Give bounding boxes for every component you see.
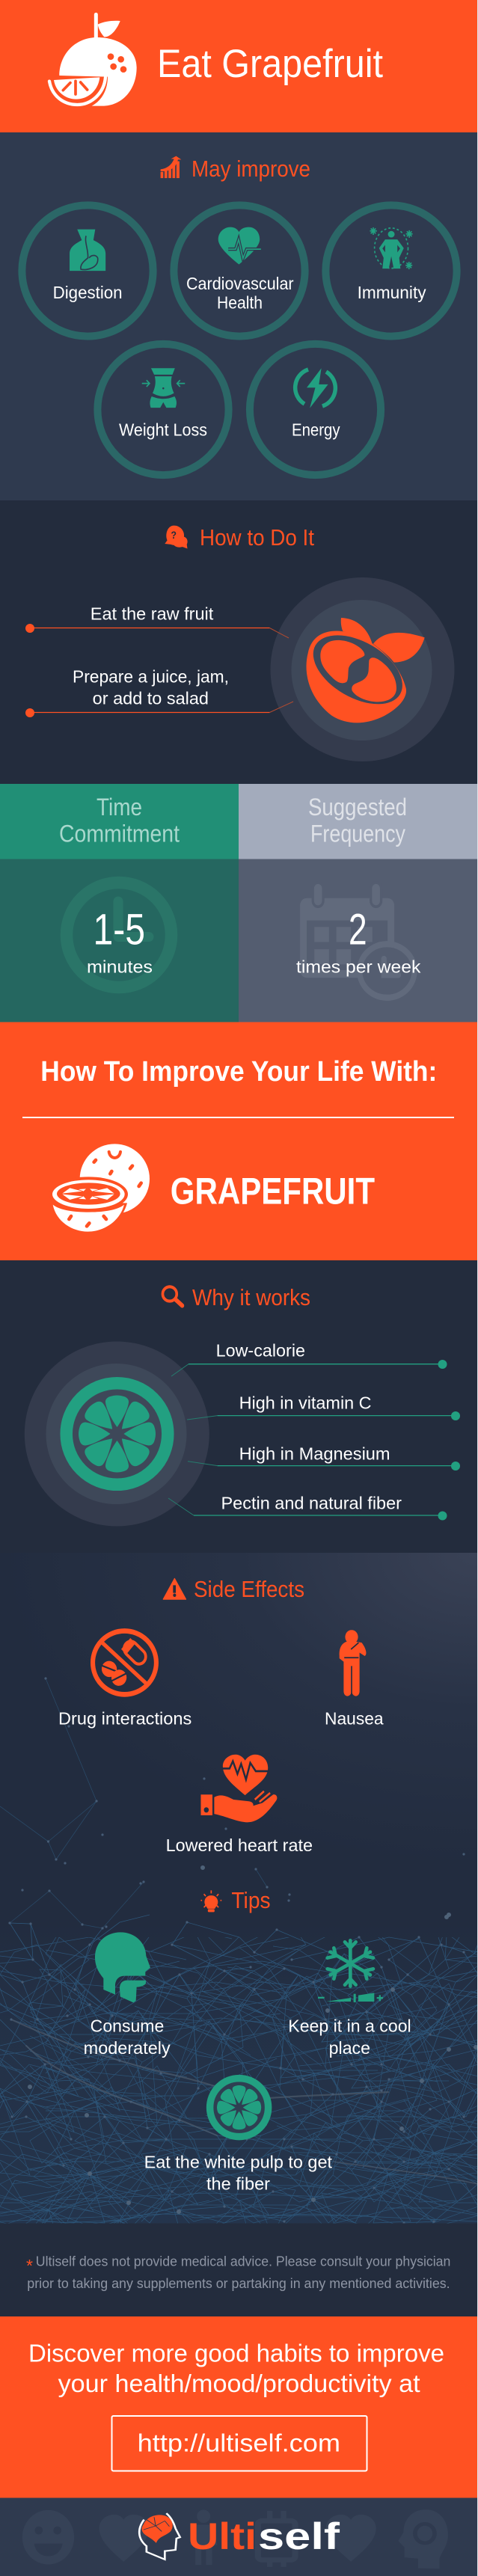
panel: suggested frequency: 2 bbox=[349, 905, 367, 954]
benefit: cardiovascular health: Health bbox=[217, 292, 263, 312]
callout: eat the raw fruit bbox=[25, 604, 289, 638]
right edge hairline bbox=[477, 0, 478, 2576]
benefit: immunity bbox=[325, 205, 457, 337]
callout: prepare a juice: or add to salad bbox=[93, 688, 209, 708]
benefit: cardiovascular health: Cardiovascular bbox=[186, 274, 294, 293]
icon: waist bbox=[142, 368, 185, 408]
panel: how to improve your life banner: GRAPEFRUIT bbox=[171, 1170, 375, 1212]
illustration: halved grapefruit in circles bbox=[271, 577, 455, 761]
tip: eat the white pulp: Eat the white pulp to get bbox=[144, 2153, 333, 2172]
icon: heart over hand bbox=[200, 1755, 277, 1822]
panel: suggested frequency: Frequency bbox=[310, 821, 405, 847]
icon: citrus wheel bbox=[210, 2079, 269, 2137]
illustration: citrus wheel in circles bbox=[25, 1342, 209, 1526]
logo: ultiself bbox=[139, 2513, 340, 2560]
icon: no pills bbox=[93, 1631, 156, 1694]
side effect: drug interactions bbox=[58, 1631, 191, 1728]
tip: keep it in a cool place bbox=[288, 1940, 411, 2058]
panel: suggested frequency: times per week bbox=[296, 957, 421, 977]
panel: call to action: your health/mood/productivity at bbox=[58, 2370, 420, 2397]
heading: tips: Tips bbox=[231, 1887, 271, 1913]
benefit: weight loss: Weight Loss bbox=[119, 420, 207, 439]
heading: how to do it: How to Do It bbox=[200, 524, 314, 551]
callout: high in vitamin c: High in vitamin C bbox=[239, 1393, 372, 1412]
icon: calendar with clock bbox=[300, 883, 414, 998]
callout: prepare a juice: Prepare a juice, jam, bbox=[73, 667, 229, 687]
icon: orange with slice bbox=[49, 14, 137, 106]
icon: snowflake with slider bbox=[318, 1940, 383, 2002]
heading: side effects: Side Effects bbox=[194, 1576, 304, 1602]
title: Eat Grapefruit bbox=[157, 42, 383, 86]
side effect: nausea: Nausea bbox=[325, 1708, 384, 1728]
callout: prepare a juice bbox=[25, 667, 293, 717]
side effect: drug interactions: Drug interactions bbox=[58, 1708, 191, 1728]
icon: whole and halved grapefruit bbox=[49, 1144, 150, 1235]
tip: eat the white pulp: the fiber bbox=[206, 2174, 270, 2194]
panel: header bbox=[0, 0, 478, 132]
heading: tips bbox=[200, 1887, 271, 1913]
icon: heart with pulse bbox=[218, 227, 261, 264]
callout: eat the raw fruit: Eat the raw fruit bbox=[91, 604, 214, 624]
tip: consume moderately: moderately bbox=[84, 2038, 171, 2058]
icon: clock behind number bbox=[67, 883, 171, 987]
side effect: lowered heart rate bbox=[166, 1755, 313, 1855]
side effect: lowered heart rate: Lowered heart rate bbox=[166, 1836, 313, 1855]
panel: suggested frequency bbox=[239, 784, 478, 1022]
panel: why it works bbox=[0, 1260, 478, 1553]
benefit: immunity: Immunity bbox=[358, 283, 426, 302]
heading: why it works: Why it works bbox=[192, 1284, 310, 1310]
benefit: energy bbox=[250, 344, 381, 475]
tip: consume moderately: Consume bbox=[91, 2017, 164, 2036]
panel: call to action: Discover more good habits to improve bbox=[28, 2340, 444, 2367]
heading: may improve: May improve bbox=[191, 156, 310, 182]
panel: may improve bbox=[0, 132, 478, 501]
callout: low-calorie bbox=[171, 1341, 447, 1376]
tip: consume moderately bbox=[84, 1932, 171, 2058]
panel: how to improve your life banner: How To Improve Your Life With: bbox=[40, 1056, 437, 1088]
side effect: nausea bbox=[325, 1630, 384, 1728]
panel: side effects and tips background bbox=[0, 1553, 478, 2269]
benefit: digestion bbox=[22, 205, 153, 337]
panel: footer bbox=[0, 2498, 478, 2576]
panel: time commitment: Time bbox=[96, 794, 142, 821]
icon: lightning bolt bbox=[295, 368, 335, 408]
panel: time commitment: Commitment bbox=[59, 821, 180, 847]
logo: ultiself: Ulti bbox=[188, 2515, 257, 2557]
link button bbox=[112, 2416, 367, 2471]
benefit: digestion: Digestion bbox=[53, 283, 123, 302]
icon: head profile bbox=[95, 1932, 150, 2002]
callout: high in vitamin c bbox=[187, 1393, 460, 1420]
panel: time commitment bbox=[0, 784, 239, 1022]
panel: disclaimer: * bbox=[26, 2256, 33, 2275]
tip: keep it in a cool place: Keep it in a cool bbox=[288, 2017, 411, 2036]
tip: keep it in a cool place: place bbox=[329, 2038, 370, 2058]
benefit: weight loss bbox=[97, 344, 229, 475]
background icons bbox=[22, 2509, 448, 2569]
callout: pectin and natural fiber: Pectin and natural fiber bbox=[221, 1493, 402, 1512]
section: tips bbox=[84, 1887, 411, 2194]
panel: time commitment: minutes bbox=[87, 957, 153, 977]
logo: ultiself: self bbox=[258, 2515, 340, 2557]
callout: pectin and natural fiber bbox=[168, 1493, 447, 1520]
icon: protected person bbox=[370, 227, 413, 269]
icon: nauseous person bbox=[340, 1630, 366, 1696]
tip: eat the white pulp bbox=[144, 2079, 333, 2194]
callout: high in magnesium bbox=[188, 1444, 460, 1471]
benefit: cardiovascular health bbox=[174, 205, 305, 337]
panel: how to improve your life banner bbox=[0, 1022, 478, 1260]
callout: low-calorie: Low-calorie bbox=[216, 1341, 305, 1361]
panel: how to do it bbox=[0, 500, 478, 784]
panel: disclaimer: prior to taking any supplements or partaking in any mentioned activities. bbox=[27, 2276, 450, 2291]
panel: call to action bbox=[0, 2316, 478, 2498]
heading: how to do it: ? bbox=[171, 529, 177, 541]
icon: digestive system bbox=[70, 230, 105, 271]
callout: high in magnesium: High in Magnesium bbox=[239, 1444, 390, 1463]
panel: time commitment: 1-5 bbox=[93, 905, 145, 954]
panel: disclaimer bbox=[0, 2223, 478, 2316]
panel: disclaimer: Ultiself does not provide medical advice. Please consult your physician bbox=[36, 2254, 450, 2269]
section: side effects bbox=[58, 1576, 384, 1855]
panel: suggested frequency: Suggested bbox=[308, 794, 407, 821]
link button: http://ultiself.com bbox=[138, 2429, 340, 2456]
benefit: energy: Energy bbox=[292, 420, 340, 439]
